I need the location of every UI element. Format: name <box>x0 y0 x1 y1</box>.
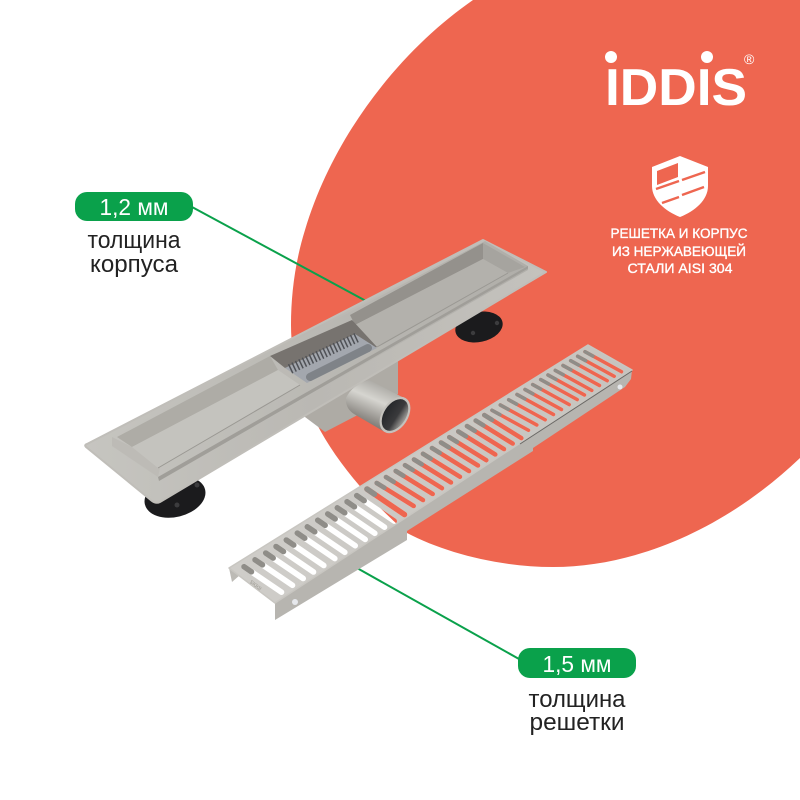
right inner wall <box>350 243 483 325</box>
tray end wall, left <box>112 437 160 477</box>
callout: 1,5 mm grate: решетки <box>530 709 624 736</box>
right tile floor <box>355 259 508 347</box>
text: material <box>610 226 748 276</box>
grate rivets <box>292 384 622 605</box>
left tile floor <box>132 370 300 468</box>
foot: left <box>140 470 210 524</box>
floor front lines <box>158 273 508 468</box>
callout: 1,5 mm grate: толщина <box>528 686 626 713</box>
callout: 1,2 mm body <box>75 192 193 278</box>
outlet box <box>303 358 398 432</box>
tray front edge shadow <box>158 266 528 481</box>
callout: 1,2 mm body: корпуса <box>90 251 179 278</box>
slot grate <box>229 345 632 620</box>
logo: IDDIS: IDDIS <box>605 59 747 117</box>
callout: 1,2 mm body: 1,2 мм <box>100 194 168 220</box>
leader line: body thickness <box>192 207 366 301</box>
logo: IDDIS: ® <box>744 51 755 67</box>
text: material: РЕШЕТКА И КОРПУС <box>610 226 748 241</box>
hair grate <box>285 334 377 383</box>
callout: 1,5 mm grate <box>518 648 636 736</box>
grate top surface <box>229 345 632 603</box>
left inner wall <box>117 356 278 447</box>
engraved mark: IDDIS <box>249 578 263 591</box>
drain channel product <box>85 240 546 524</box>
callout: 1,5 mm grate: 1,5 мм <box>542 651 612 677</box>
text: material: СТАЛИ AISI 304 <box>628 261 733 276</box>
callout: 1,2 mm body: толщина <box>88 227 181 254</box>
grate end flap <box>229 566 240 582</box>
text: material: ИЗ НЕРЖАВЕЮЩЕЙ <box>612 244 746 259</box>
tray rim <box>112 241 528 482</box>
dark well <box>270 320 377 368</box>
right back wall <box>483 243 525 273</box>
mounting flange <box>85 240 546 503</box>
slots <box>244 352 622 592</box>
icon: shield <box>652 156 708 217</box>
red background shape <box>291 0 800 567</box>
grate side strip <box>275 370 632 620</box>
shadow line under top edge <box>520 371 632 444</box>
leader line: grate thickness <box>357 568 519 659</box>
foot: right <box>452 307 506 347</box>
outlet pipe <box>346 380 417 439</box>
